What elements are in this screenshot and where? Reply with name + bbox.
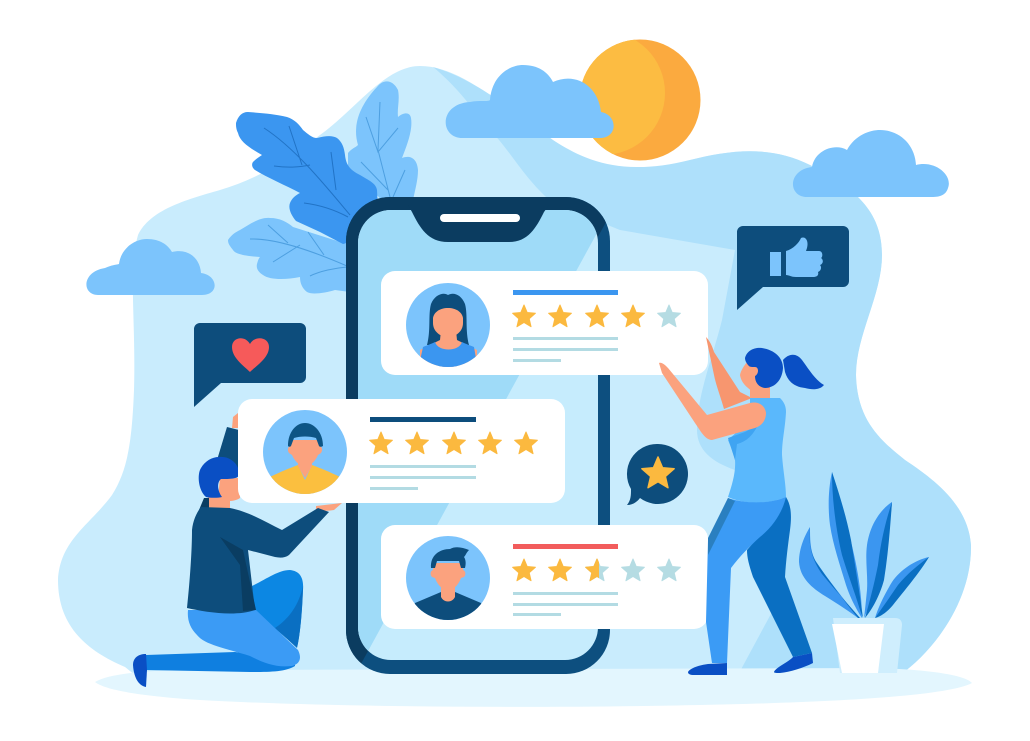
stars: two and a half of five [513, 559, 680, 581]
speech bubble: heart [194, 323, 306, 407]
phone speaker [440, 214, 520, 222]
man neck [208, 495, 230, 510]
man hair [199, 457, 239, 498]
phone notch [408, 205, 549, 242]
review text lines [513, 337, 618, 362]
review text lines [370, 465, 476, 490]
woman shoe right [774, 653, 813, 673]
woman back leg [747, 497, 812, 657]
man face [218, 478, 240, 501]
cloud: centre over sun [446, 65, 614, 138]
cloud: left [86, 239, 215, 295]
review card: bottom [381, 525, 708, 629]
icon: heart [232, 338, 269, 372]
sun [582, 40, 700, 160]
leaf: centre tall [829, 472, 863, 618]
woman top [728, 398, 786, 503]
woman front arm [659, 363, 766, 440]
woman hip shade [708, 498, 735, 555]
potted plant [799, 472, 929, 673]
avatar: woman [406, 283, 490, 370]
rating bar: dark [370, 417, 476, 422]
phone [340, 190, 620, 680]
review text lines [513, 592, 618, 616]
speech bubble: star [627, 444, 688, 505]
rating bar: blue [513, 290, 618, 295]
cloud: right [793, 130, 949, 197]
woman shoe left [688, 663, 727, 675]
woman hair [745, 348, 783, 388]
stars: five of five [370, 432, 537, 454]
leaf: left [799, 527, 860, 618]
man hand under card [316, 503, 342, 511]
review card: top [381, 271, 708, 375]
man raised arm and hand [214, 413, 242, 470]
background blob [58, 66, 971, 675]
man back collar [199, 498, 209, 510]
review card: middle [238, 399, 565, 503]
man torso and arm [187, 507, 329, 614]
stars: four of five [513, 305, 680, 327]
man knee, raised thigh [250, 570, 303, 647]
woman neck [750, 385, 770, 400]
woman ponytail [783, 355, 824, 389]
man torso shade [220, 537, 256, 611]
rating bar: red [513, 544, 618, 549]
speech bubble: thumbs up [737, 226, 849, 310]
person: kneeling man [133, 413, 342, 687]
person: standing woman [659, 337, 824, 675]
woman front leg [706, 497, 786, 663]
pot [832, 624, 884, 673]
man thigh [188, 610, 300, 666]
woman face [740, 360, 766, 391]
leaf: dark blue [236, 112, 378, 244]
pot shadow [833, 618, 902, 673]
leaf: bottom light [228, 218, 350, 293]
leaf: light upper right [348, 81, 418, 205]
woman back arm [706, 337, 752, 409]
woman top shade [728, 425, 758, 460]
leaf: far right [875, 557, 929, 618]
man shin shade [275, 586, 303, 648]
icon: star [642, 457, 674, 488]
ground shadow [95, 668, 972, 707]
avatar: man with dark shirt [405, 536, 490, 625]
avatar: man with yellow shirt [263, 410, 347, 500]
leaf: right tall [864, 502, 892, 618]
icon: thumbs up [770, 237, 823, 277]
man foot [133, 654, 147, 687]
man lower leg [146, 652, 295, 672]
illustration: customer reviews on a smartphone [58, 40, 972, 707]
